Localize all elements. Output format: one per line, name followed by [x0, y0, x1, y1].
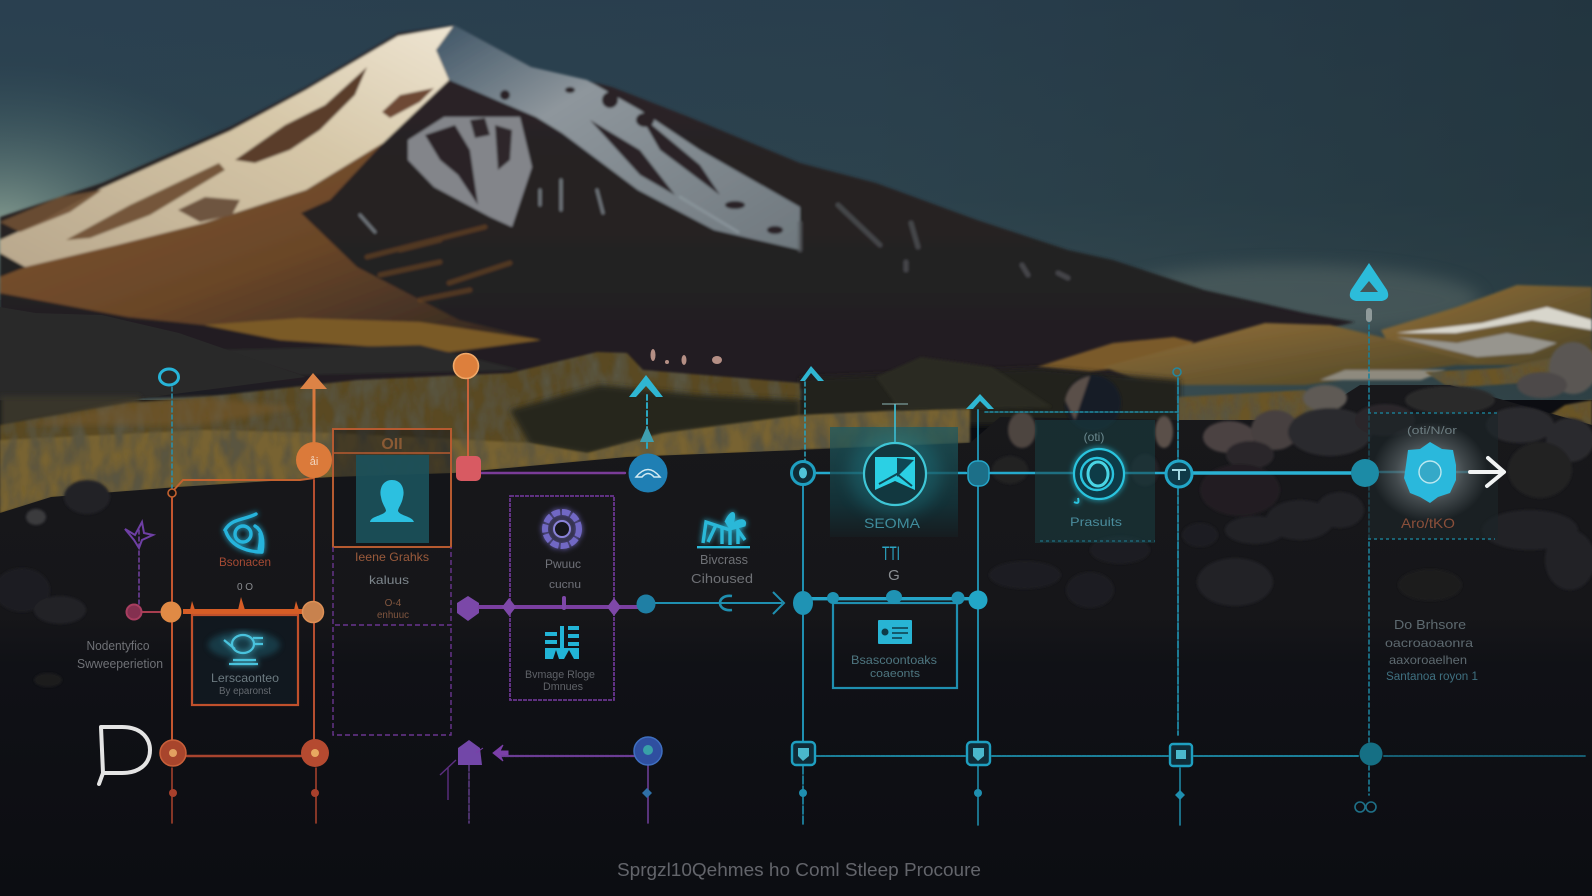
mark: column glyph: TTI — [882, 544, 900, 565]
shaded snow near peak — [436, 25, 800, 250]
text block: right annotation — [1385, 618, 1478, 683]
arrow: cyan up chevron — [629, 375, 663, 397]
annotation line one: Do Brhsore — [1394, 618, 1466, 632]
icon: circular map badge — [864, 443, 926, 505]
icon: machine — [224, 635, 263, 664]
bottom row nodes — [160, 737, 1382, 812]
node: purple bottom bell with arrow — [440, 740, 508, 800]
arrow: cyan up chevron second — [800, 366, 824, 381]
label: small marks: 0 O — [237, 582, 253, 593]
node: teal shield 1 — [792, 742, 815, 765]
annotation line two: Swweeperietion — [77, 656, 163, 671]
dark rocky ground — [0, 385, 1592, 896]
label: blocks title: Bvmage Rloge — [525, 669, 595, 681]
left dark hill — [0, 307, 306, 400]
ticks on orange bar — [190, 597, 299, 610]
label: card caption: Aro/tKO — [1401, 515, 1455, 531]
node: teal ring — [792, 462, 814, 484]
node: red 2 — [301, 739, 329, 767]
foreground golden hills — [0, 352, 800, 520]
rocks — [0, 342, 1592, 687]
arrow: white right — [1470, 458, 1504, 486]
panel: cyan image — [356, 455, 429, 543]
dark base below the mountain — [800, 368, 1180, 425]
node: blue mid — [636, 594, 656, 614]
underline — [697, 546, 750, 548]
label: card tag: (oti) — [1084, 430, 1104, 444]
node: pink — [126, 604, 142, 620]
icon: purple star — [125, 522, 153, 548]
node: cyan ring with symbol — [1166, 461, 1192, 487]
label: blocks detail: Dmnues — [543, 681, 583, 693]
node: teal dot — [1360, 742, 1382, 766]
brown streaks in snow — [0, 190, 102, 232]
label inside upper orange node: åi — [310, 456, 318, 468]
marker: orange up triangle — [300, 373, 327, 389]
annotation line one: Nodentyfico — [86, 638, 150, 653]
label: card title: SEOMA — [864, 515, 921, 531]
panel: orange framed box with teapot icon — [192, 615, 298, 705]
node: teal square — [1170, 744, 1192, 766]
label: card detail: kaluus — [369, 573, 409, 587]
label: card title: Bsascoontoaks — [851, 653, 937, 667]
process step: cyan shelter icon with arrow — [636, 512, 784, 614]
panel: spiral card — [1035, 420, 1155, 543]
panel: purple dashed column — [478, 496, 646, 700]
grass band — [0, 407, 970, 513]
golden strip — [204, 318, 541, 352]
label: title: Bivcrass — [700, 552, 748, 567]
node: small teal circle — [1351, 459, 1379, 487]
panel: cyan framed id card — [793, 590, 988, 688]
mountain silhouette — [0, 25, 1355, 400]
node: purple hexagon — [457, 596, 479, 621]
node: large orange upper — [296, 442, 332, 478]
node: large blue circle with eye — [628, 454, 668, 492]
far right hills — [1037, 285, 1592, 385]
label: card number: O-4 — [385, 598, 402, 609]
icon: id card — [878, 620, 912, 644]
label: orange caption: Bsonacen — [219, 555, 271, 569]
panel: glowing central card — [830, 404, 958, 584]
marker: teal warning triangle — [1350, 263, 1388, 301]
node: orange left — [160, 602, 182, 622]
lit brown slope — [0, 143, 541, 340]
sunlit snow face — [0, 26, 454, 267]
annotation line two: oacroaoaonra — [1385, 636, 1473, 650]
snow centre patch with fingers — [408, 117, 532, 227]
icon: person — [370, 480, 414, 522]
lower snow streaks and rock lines — [360, 180, 1068, 300]
icon: purple gear — [545, 512, 579, 546]
connector network: horizontal and vertical lines — [139, 318, 1585, 825]
label: detail: Cihoused — [691, 571, 753, 586]
label: card name: Ieene Grahks — [355, 550, 429, 564]
icon: white speech-bubble D logo — [99, 727, 150, 784]
right dark olive — [876, 357, 1052, 410]
marker: pale cap — [1366, 308, 1372, 322]
panel: left column icon and label — [219, 514, 271, 593]
label: card detail: coaeonts — [870, 668, 921, 680]
marker: orange top circle — [454, 354, 478, 378]
distant pale figures — [650, 349, 722, 365]
node: indigo — [634, 737, 662, 765]
dark rock flecks in shaded snow — [500, 87, 783, 234]
label: card caption: Prasuits — [1070, 515, 1122, 529]
nodes on cyan bar — [793, 590, 988, 615]
left side annotation text — [77, 638, 163, 671]
node: cyan capsule on top line — [968, 461, 989, 486]
label: card footer: enhuuc — [377, 610, 409, 621]
tick on purple bar — [562, 596, 566, 610]
icon: gear — [1404, 442, 1456, 503]
label: box text: Lerscaonteo — [211, 671, 279, 685]
label: gear detail: cucnu — [549, 579, 581, 591]
marker: small teal arrowhead — [640, 426, 654, 442]
annotation line four: Santanoa royon 1 — [1386, 671, 1478, 683]
marker: small node on left line — [168, 489, 176, 497]
orange band with nodes — [160, 442, 332, 622]
icon: cyan swirl — [225, 514, 263, 552]
marker: small teal ring top — [1173, 368, 1181, 376]
mark: C shape — [720, 596, 732, 610]
label: box subtext: By eparonst — [219, 686, 271, 697]
mark: letter: G — [888, 567, 900, 584]
marker: cyan ring — [160, 369, 178, 385]
bar: cyan — [803, 597, 978, 600]
bar: purple — [478, 605, 646, 609]
node: red 1 — [160, 740, 186, 766]
node: orange right — [302, 602, 324, 622]
arrow and marker tops of the vertical lines — [160, 263, 1388, 497]
arrow: line to right — [655, 592, 784, 614]
heading: card tag: OII — [381, 436, 403, 453]
annotation line three: aaxoroaelhen — [1389, 653, 1467, 667]
node: pink square on purple line — [456, 456, 481, 481]
purple marker and pink node at far left — [125, 522, 153, 620]
mark: double rings — [1355, 802, 1376, 812]
node: teal shield 2 — [967, 742, 990, 765]
icon: shelter — [703, 512, 746, 545]
icon: spiral badge — [1074, 449, 1124, 503]
glow — [1372, 422, 1488, 522]
diamonds on purple bar — [502, 598, 621, 616]
title: bottom caption: Sprgzl10Qehmes ho Coml Stleep Procoure — [617, 860, 981, 880]
panel: final step gear card — [1351, 413, 1504, 539]
panel: profile card — [333, 429, 451, 735]
dashed purple frames — [333, 547, 451, 735]
end dots — [169, 788, 1185, 800]
arrow: cyan up chevron third — [966, 394, 994, 409]
label: gear title: Pwuuc — [545, 557, 581, 571]
label: card tag: (oti/N/or — [1407, 425, 1457, 437]
icon: cyan blocks — [545, 626, 579, 659]
bar: thick orange — [183, 609, 304, 614]
